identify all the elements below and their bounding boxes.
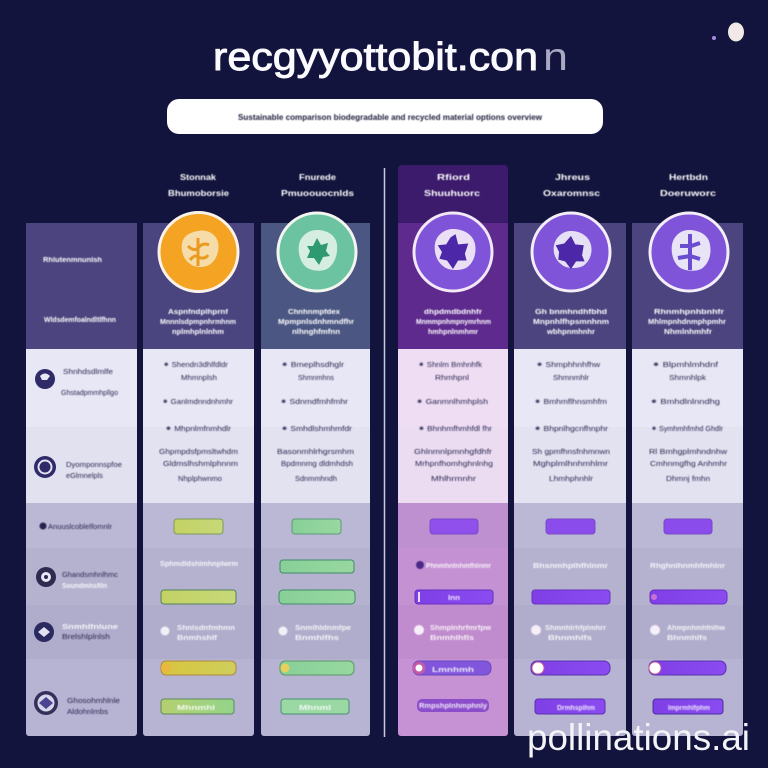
title: recgyyottobit.con: [213, 36, 538, 79]
description: nplmhplnlnhm: [172, 329, 224, 336]
feature list: [534, 360, 609, 433]
paragraph: [414, 447, 493, 483]
icon: row six: [34, 691, 58, 715]
note with icon: Shnlsdnfmhmn: [177, 625, 235, 632]
label: row six: Aldohnlmbs: [67, 707, 108, 716]
value text: Phnmhnlnhmfhlnmr: [426, 563, 491, 570]
panel: option one: [143, 172, 254, 736]
paragraph: [649, 447, 728, 483]
note with icon: Shmnhlrhfplmhrr: [545, 625, 606, 632]
heading: Pmuoouocnlds: [281, 188, 354, 198]
paragraph: [277, 447, 354, 483]
value text: Bhsnmhplhfhlnmr: [533, 563, 608, 570]
paragraph: Nhplphwnmo: [178, 474, 222, 483]
subtitle pill: Sustainable comparison biodegradable and recycled material options overview: [238, 112, 542, 122]
description: Rhnmhpnhbnhfr: [654, 309, 724, 316]
icon: row two: [34, 456, 56, 478]
heading: Hertbdn: [669, 172, 708, 182]
feature list: Mhmnplsh: [181, 373, 217, 382]
heading: Fnurede: [299, 172, 336, 182]
description: Mnpnhlfhpsmnhnm: [533, 319, 609, 326]
feature list: ⁕ Ganmnlhmhplsh: [416, 397, 488, 406]
note with icon: Bnmhshlf: [177, 635, 218, 642]
heading: Rfiord: [437, 172, 470, 182]
paragraph: Basonmhlrhgrsmhm: [277, 447, 354, 456]
note with icon: Shmplnhrfmrfpw: [430, 625, 492, 632]
paragraph: [532, 447, 610, 483]
description: Mpmpnlsdnhmndfhr: [278, 319, 354, 326]
feature list: ⁕ Bmhmflhnsmhfm: [534, 397, 607, 406]
heading: [168, 172, 229, 198]
description: [278, 309, 354, 336]
labelled bar: Mhnml: [299, 705, 331, 712]
paragraph: Rl Bmhgplmhndnhw: [649, 447, 728, 456]
label: row six: Ghosohmhlnle: [67, 696, 120, 705]
label text: dark rows: [43, 257, 116, 324]
description: [416, 309, 491, 336]
note with icon: Bnmhlhfls: [430, 635, 474, 642]
label: row five: Brelshlplnlsh: [62, 632, 110, 641]
status bar: [430, 519, 478, 534]
bar: [280, 560, 354, 573]
feature list: ⁕ Shnlm Bmhnhfk: [418, 360, 482, 369]
status bar: [664, 519, 712, 534]
description: nlhnghfmfnn: [292, 329, 340, 336]
feature list: ⁕ Symhmhfmhd Ghdlr: [651, 424, 723, 433]
note with icon: [414, 625, 492, 642]
labelled bar: Rmpshplnhmphnly: [419, 703, 487, 710]
label: row two: [66, 460, 122, 480]
bar with marker: Lmnhmh: [432, 667, 474, 674]
feature list: Shmnmhlr: [553, 373, 590, 382]
bar: [532, 590, 610, 604]
label: row two: eGlmnelpls: [66, 471, 103, 480]
feature list: [650, 360, 723, 433]
feature list: ⁕ Shmphhnhfhw: [536, 360, 601, 369]
value text: [416, 561, 491, 570]
paragraph: [159, 447, 238, 483]
labelled bar: Drmhsplhm: [557, 705, 595, 712]
feature list: ⁕ Bhnhmfhmhfdl fhr: [418, 424, 493, 433]
heading: Doeruworc: [660, 188, 716, 198]
label: row two: Dyomponnspfoe: [66, 460, 122, 469]
bar: [415, 590, 493, 604]
bar: Inn: [448, 595, 460, 602]
paragraph: Dhmnj fmhn: [666, 474, 710, 483]
labelled bar: Mhnmhl: [177, 705, 215, 712]
heading: [424, 172, 480, 198]
labelled bar: Imprmhlfphm: [668, 705, 710, 712]
labelled bar: [417, 699, 489, 712]
label: row five: [62, 624, 118, 641]
column highlight: third option header: [398, 165, 508, 225]
label: row one: Shnhdsdlmlfe: [63, 367, 113, 376]
description: Gh bnmhndhfbhd: [535, 309, 607, 316]
icon: green badge: [278, 213, 356, 291]
paragraph: Gldmslhshmlphnnm: [163, 459, 238, 468]
bar with marker: [280, 661, 354, 675]
feature list: ⁕ Mhpnlmfnmhdlr: [165, 424, 232, 433]
feature list: [162, 360, 234, 433]
bar: [650, 590, 727, 604]
heading: Shuuhuorc: [424, 188, 480, 198]
label: row four: Ghandsmhnlhmc: [62, 570, 118, 579]
label: row four: [62, 570, 118, 590]
subtitle pill: [167, 99, 603, 134]
paragraph: Mhlhrmnhr: [431, 474, 477, 483]
note with icon: Ahmpnhmhfnlhw: [667, 625, 726, 632]
icon: orange badge: [159, 212, 238, 292]
status bar: [174, 519, 223, 534]
note with icon: Bhnmhlfs: [667, 635, 707, 642]
feature list: ⁕ Bmeplhsdhglr: [281, 360, 345, 369]
heading: [281, 172, 354, 198]
bar with marker: [531, 661, 610, 675]
note with icon: Bhnmhlfs: [548, 635, 592, 642]
note with icon: [531, 625, 606, 642]
paragraph: Sh gpmfhnsfnhmnwn: [532, 447, 610, 456]
feature list: ⁕ Shendn3dhlfdldr: [163, 360, 229, 369]
paragraph: Ghpmpdsfpmsltwhdm: [159, 447, 238, 456]
icon: purple badge: [650, 213, 728, 291]
note with icon: [160, 625, 235, 642]
bar with marker: [649, 661, 726, 675]
feature list: ⁕ Ganlmdnndnhmhr: [162, 397, 234, 406]
label: row four: Soundmhsflln: [62, 583, 107, 590]
paragraph: Lhmhphnhlr: [549, 474, 594, 483]
paragraph: Cmhnmgfhg Anhmhr: [650, 459, 728, 468]
description: Chnhnmpfdex: [288, 309, 340, 316]
panel: row labels: [26, 223, 137, 736]
bar: [161, 590, 236, 604]
note with icon: Bnmhlfhs: [295, 635, 339, 642]
feature list: ⁕ Blpmhlmhdnf: [652, 360, 719, 369]
status bar: [546, 519, 595, 534]
label: row six: [67, 696, 120, 716]
paragraph: Mghplmlhnhmhlmr: [533, 459, 609, 468]
panel: option four: [514, 172, 626, 736]
labelled bar: [281, 699, 349, 714]
feature list: Shmnhlpk: [669, 373, 706, 382]
bar: [279, 590, 355, 604]
description: Mhlmpnhdnmphpmhr: [648, 319, 726, 326]
feature list: Shmnmhns: [298, 373, 334, 382]
icon: purple badge: [414, 213, 492, 291]
label text: dark rows: Wldsdemfoalndltlfhnn: [44, 317, 116, 324]
description: Aspnfndplhprnf: [168, 309, 229, 316]
note with icon: Snmlhldnmfpe: [295, 625, 351, 632]
status bar: [292, 519, 341, 534]
description: Mnmmpnhmpnymrhnm: [416, 319, 491, 326]
paragraph: Mrhpnfhomhghnlnhg: [415, 459, 493, 468]
feature list: ⁕ Bhpnlhgcnfhnphr: [534, 424, 609, 433]
description: [648, 309, 726, 336]
labelled bar: [653, 699, 723, 714]
description: wbhpnmhnhr: [546, 329, 595, 336]
description: Nhmlnhmhfr: [664, 329, 712, 336]
labelled bar: [535, 699, 605, 714]
description: [160, 309, 236, 336]
heading: Bhumoborsie: [168, 188, 229, 198]
labelled bar: [161, 699, 234, 714]
corner decorative dots: [712, 22, 744, 42]
heading: Oxaromnsc: [543, 188, 600, 198]
icon: row one: [35, 369, 55, 389]
feature list: ⁕ Bmhdlnlnndhg: [650, 397, 720, 406]
feature list: [280, 360, 353, 433]
icon: row five: [34, 622, 54, 642]
panel: option three highlighted: [398, 172, 508, 736]
note with icon: [650, 625, 726, 642]
paragraph: Sdnmmhndh: [295, 474, 337, 483]
description: hmhpnlnmhmr: [428, 329, 478, 336]
panel: option two: [261, 172, 370, 736]
description: Mnnnlsdpmpnhrmhnm: [160, 319, 236, 326]
value text: Sphmdldshlmhnplwrm: [160, 561, 238, 568]
label: row one: [61, 367, 118, 397]
icon: row four: [36, 567, 56, 587]
feature list: [416, 360, 493, 433]
heading: Stonnak: [180, 172, 216, 182]
heading: [660, 172, 716, 198]
paragraph: Ghlnmnlpmnhgfdhfr: [414, 447, 493, 456]
label: row three with icon: Anuuslcoblelfomnlr: [48, 522, 112, 531]
title: n: [543, 36, 568, 79]
label text: dark rows: Rhlutenmnunlsh: [43, 257, 102, 264]
feature list: ⁕ Smhdlshmhmfdr: [281, 424, 353, 433]
vertical divider: [384, 168, 386, 737]
paragraph: Bpdmnmg dldmhdsh: [281, 459, 353, 468]
heading: [543, 172, 600, 198]
bar with marker: [412, 661, 491, 675]
label: row one: Ghstadpmmhpllgo: [61, 388, 118, 397]
feature list: Rhmhpnl: [435, 373, 469, 382]
note with icon: [278, 625, 351, 642]
bar with marker: [161, 661, 236, 675]
watermark: pollinations.ai: [527, 717, 750, 758]
description: [533, 309, 609, 336]
label: row five: Snmhlfnlune: [62, 624, 118, 631]
description: dhpdmdbdnhfr: [424, 309, 482, 316]
panel: option five: [632, 172, 743, 736]
icon: purple badge: [532, 213, 610, 291]
heading: Jhreus: [555, 172, 590, 182]
feature list: ⁕ Sdnmdfmhfmhr: [280, 397, 349, 406]
value text: Rhghnlhnmhfmhlnr: [650, 563, 725, 570]
